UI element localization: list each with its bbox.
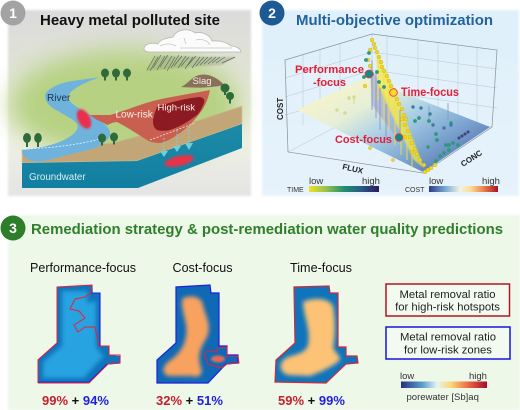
pareto points: [363, 38, 437, 174]
badge 1: [0, 0, 26, 26]
groundwater layer: [22, 124, 242, 188]
axis labels: COST: [276, 98, 285, 120]
dashed river line: [24, 138, 103, 149]
value: cost-focus: 32% + 51%: [156, 393, 223, 408]
badge 1: 1: [9, 5, 17, 21]
cost legend: COST: [405, 187, 425, 194]
time legend: low: [309, 176, 323, 187]
time legend: high: [362, 176, 380, 187]
trees: [23, 68, 234, 147]
porewater colour scale: low: [400, 371, 414, 382]
dashed boundary: [150, 123, 195, 140]
slag heap: [181, 75, 224, 88]
map: time-focus: [275, 286, 358, 383]
value: performance-focus: 99% + 94%: [42, 393, 109, 408]
rain: [146, 55, 236, 71]
panel: heavy metal polluted site: Slag: [192, 76, 212, 87]
highlighted solutions: [365, 70, 373, 78]
time legend: [287, 176, 380, 194]
panel: multi-objective optimization: -focus: [313, 77, 346, 89]
porewater colour scale: [400, 371, 487, 403]
callouts: Performance: [295, 64, 364, 76]
solution strips: [370, 66, 402, 140]
panel: heavy metal polluted site: [8, 10, 251, 196]
legend box: high-risk: for high-risk hotspots: [395, 302, 500, 314]
value: time-focus: 59% + 99%: [278, 393, 345, 408]
panel: multi-objective optimization: Time-focus: [401, 85, 459, 99]
heading 3: Remediation strategy & post-remediation water quality predictions: [31, 221, 503, 238]
map: performance-focus: [38, 285, 120, 383]
cloud: [144, 30, 241, 52]
legend box: high-risk: Metal removal ratio: [399, 289, 496, 301]
river: [22, 77, 110, 161]
subheading: cost-focus: Cost-focus: [172, 261, 232, 275]
panel: heavy metal polluted site: Low-risk: [116, 110, 154, 120]
legend box: low-risk: [386, 327, 510, 359]
cost legend: low: [429, 176, 443, 187]
3D grid box: [285, 34, 497, 152]
vertical stems: [349, 55, 448, 168]
low-risk zone: [90, 90, 210, 143]
legend box: low-risk: Metal removal ratio: [400, 332, 496, 344]
seepage arrows: [160, 126, 193, 157]
panel: remediation strategy: [8, 215, 520, 410]
heading 2: Multi-objective optimization: [296, 12, 493, 29]
porewater colour scale: porewater [Sb]aq: [406, 392, 479, 403]
porewater colour scale: high: [469, 371, 487, 382]
groundwater hotspot: [163, 153, 195, 169]
panel: multi-objective optimization: CONC: [459, 148, 484, 169]
badge 2: [260, 0, 284, 26]
badge 3: 3: [9, 220, 17, 236]
panel: multi-objective optimization: Cost-focus: [335, 134, 392, 146]
panel: heavy metal polluted site: High-risk: [158, 102, 195, 114]
cost legend: [405, 176, 500, 194]
labels: River: [47, 93, 71, 104]
panel: multi-objective optimization: FLUX: [342, 162, 365, 176]
ground surface: [22, 106, 242, 163]
badge 3: [0, 216, 26, 240]
response surface: [297, 78, 490, 172]
cost legend: high: [482, 176, 500, 187]
panel: heavy metal polluted site: Groundwater: [29, 172, 86, 183]
time legend: TIME: [287, 187, 304, 194]
river hotspot: [74, 107, 94, 131]
badge 2: 2: [268, 5, 276, 21]
map: cost-focus: [157, 285, 239, 383]
panel: multi-objective optimization: [262, 10, 519, 196]
heading 1: Heavy metal polluted site: [40, 12, 220, 29]
subheading: time-focus: Time-focus: [290, 261, 352, 275]
legend box: high-risk: [386, 284, 510, 316]
high-risk zone: [153, 97, 204, 131]
subheading: performance-focus: Performance-focus: [30, 261, 136, 275]
legend box: low-risk: for low-risk zones: [404, 344, 492, 356]
